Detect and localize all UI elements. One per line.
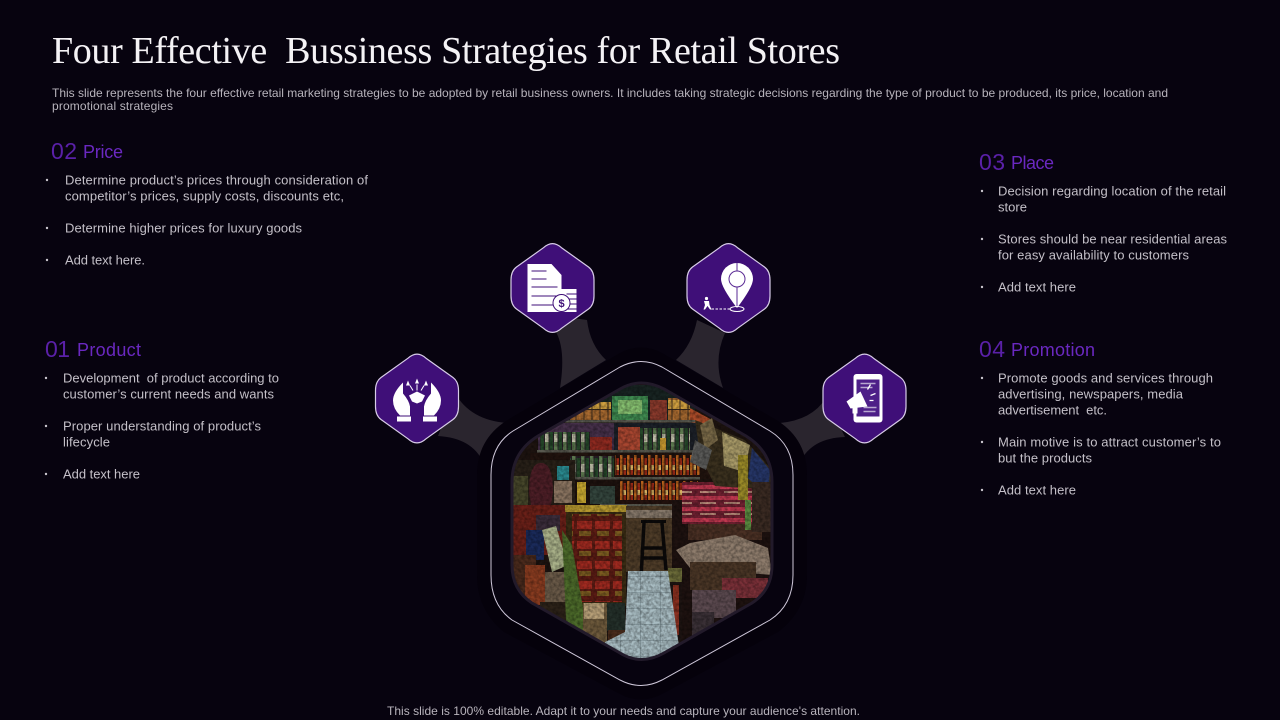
bullet list: price: Add text here.	[65, 252, 145, 268]
bullet list: promotion: but the products	[998, 450, 1092, 466]
bullet list: place	[981, 184, 1228, 294]
heading: 04 promotion: 04	[979, 336, 1005, 362]
footer note: This slide is 100% editable. Adapt it to your needs and capture your audience's attention.	[387, 704, 860, 718]
right wall goods	[668, 482, 770, 636]
panel: 02 price	[46, 138, 368, 268]
back room and stool	[626, 506, 672, 572]
heading: 03 place	[979, 149, 1054, 175]
photo border	[512, 383, 772, 660]
bullet list: price: Determine higher prices for luxury goods	[65, 220, 302, 236]
bullet list: place: store	[998, 200, 1027, 214]
icon: price document with coins	[511, 244, 594, 332]
subtitle description: This slide represents the four effective retail marketing strategies to be adopted by retail business owners. It includes taking strategic decisions regarding the type of product to be produced, its price, location and	[52, 86, 1168, 100]
hanging goods upper right	[690, 418, 772, 532]
bullet list: product	[45, 370, 279, 482]
panel: 01 product	[45, 336, 279, 482]
third and fourth shelf goods	[570, 455, 700, 504]
bullet list: product: Add text here	[63, 466, 140, 482]
heading: 01 product: 01	[45, 336, 70, 362]
central hexagon frame	[477, 348, 807, 700]
bullet list: promotion: Add text here	[998, 482, 1076, 498]
bullet list: place: Decision regarding location of the retail	[998, 184, 1226, 198]
red display rack	[562, 505, 627, 647]
shelf boards	[537, 420, 700, 506]
bullet list: promotion: advertising, newspapers, media	[998, 386, 1184, 402]
heading: 03 place: 03	[979, 149, 1005, 175]
bullet list: place: Stores should be near residential areas	[998, 232, 1228, 246]
bullet list: product: customer’s current needs and wants	[63, 386, 274, 402]
connectors	[438, 318, 845, 462]
top shelf goods	[570, 385, 710, 424]
photo: grocery store interior	[514, 384, 770, 658]
bullet list: product: Proper understanding of product’s	[63, 418, 262, 434]
subtitle description: promotional strategies	[52, 99, 173, 113]
bullet list: price: Determine product’s prices through consideration of	[65, 172, 368, 188]
bullet list: place: for easy availability to customers	[998, 248, 1190, 262]
second shelf goods	[538, 423, 702, 451]
bullet list: promotion: Main motive is to attract customer’s to	[998, 434, 1221, 450]
heading: 04 promotion	[979, 336, 1095, 362]
icon: promotion phone with megaphone	[823, 354, 906, 443]
bullet list: price: competitor’s prices, supply costs, discounts etc,	[65, 188, 344, 204]
bullet list: product: Development of product according to	[63, 370, 279, 386]
heading: 03 place: Place	[1011, 153, 1054, 173]
heading: 01 product: Product	[77, 340, 141, 360]
heading: 02 price: Price	[83, 142, 123, 162]
panel: 04 promotion	[979, 336, 1221, 498]
heading: 02 price: 02	[51, 138, 77, 164]
heading: 04 promotion: Promotion	[1011, 340, 1095, 360]
title: Four Effective Bussiness Strategies for Retail Stores	[52, 30, 840, 72]
photo texture	[514, 385, 770, 658]
tiled floor	[604, 571, 680, 662]
bullet list: price	[46, 172, 368, 268]
bullet list: promotion: Promote goods and services through	[998, 370, 1213, 386]
icon: price document with coins: $	[558, 298, 565, 310]
heading: 02 price	[51, 138, 123, 164]
icon: place location pin	[687, 244, 770, 332]
bullet list: place: Add text here	[998, 280, 1076, 294]
left wall goods	[510, 460, 575, 627]
bullet list: promotion: advertisement etc.	[998, 402, 1107, 418]
subtitle description	[52, 86, 1168, 113]
bullet list: promotion	[981, 370, 1221, 498]
heading: 01 product	[45, 336, 141, 362]
panel: 03 place	[979, 149, 1228, 294]
bullet list: product: lifecycle	[63, 434, 110, 450]
icon: product hands with box	[376, 354, 458, 443]
